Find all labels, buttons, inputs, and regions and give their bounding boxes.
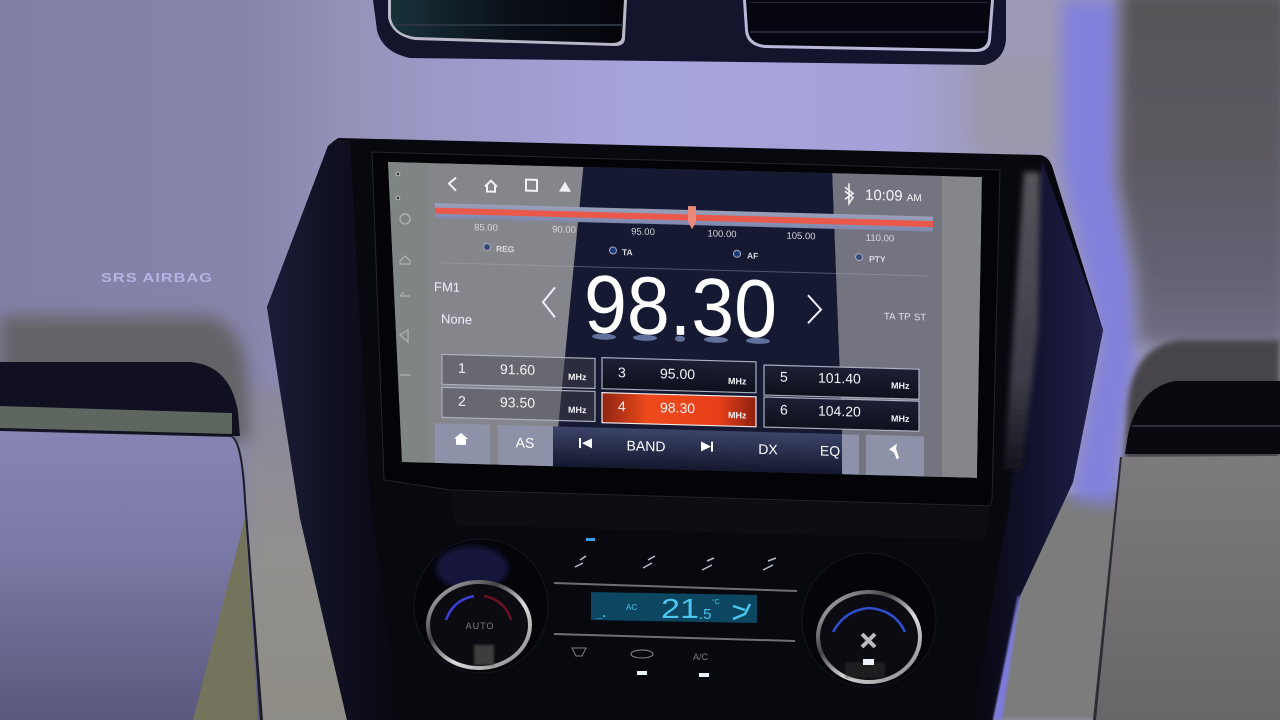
preset labels: MHz	[728, 376, 747, 387]
radio options	[484, 243, 886, 264]
preset labels: 3	[618, 364, 626, 380]
main frequency: 98.30	[584, 259, 777, 355]
left knob: AUTO: AUTO	[466, 621, 494, 631]
air vents housing	[373, 0, 1006, 65]
preset labels: MHz	[568, 405, 587, 415]
preset labels: 4	[618, 398, 626, 414]
radio options: REG	[496, 244, 515, 254]
main frequency	[588, 275, 774, 344]
tune arrows	[543, 287, 821, 325]
label: SRS AIRBAG: SRS AIRBAG	[101, 270, 213, 285]
shadowed right column	[1118, 0, 1280, 345]
preset labels: 101.40	[818, 369, 861, 387]
band labels: FM1	[434, 279, 460, 295]
preset labels: MHz	[728, 410, 747, 421]
temperature display: _.	[595, 606, 606, 620]
lower buttons	[572, 648, 709, 662]
icon: bluetooth	[845, 183, 853, 203]
radio options: TA	[622, 247, 633, 257]
console bezel	[267, 138, 1103, 720]
tuner band	[435, 203, 933, 232]
frequency scale: 110.00	[866, 233, 894, 245]
chrome reflection on right wing	[1004, 172, 1040, 470]
blue light column	[1062, 0, 1136, 505]
preset labels: 1	[458, 360, 466, 376]
right knob: fan	[802, 553, 936, 687]
fan mode icons	[575, 556, 776, 570]
preset labels: MHz	[891, 380, 910, 391]
preset buttons	[442, 353, 919, 431]
temperature display: °C	[712, 598, 720, 606]
frequency scale: 90.00	[552, 224, 576, 236]
lower buttons: A/C	[693, 652, 709, 662]
temperature display: 21	[661, 593, 699, 624]
frequency scale: 85.00	[474, 222, 498, 234]
preset labels: 5	[780, 368, 788, 385]
left lower panel with dark trim strip	[0, 316, 263, 720]
radio interface skewed to the screen perspective: None	[441, 311, 472, 327]
clock: 10:09 AM	[865, 187, 922, 205]
right lower panel with dark trim strip	[1093, 340, 1280, 720]
climate control panel	[414, 538, 936, 687]
side bezel icons	[396, 172, 410, 375]
status flags: TA TP ST	[884, 311, 926, 323]
preset labels: 6	[780, 401, 788, 418]
frequency scale: 105.00	[786, 231, 816, 242]
preset labels: 95.00	[660, 365, 695, 382]
bottom control icons	[454, 432, 899, 460]
bottom control bar: DX	[758, 441, 778, 457]
preset labels: 2	[458, 393, 466, 409]
bottom control bar	[435, 423, 924, 476]
indicator LEDs	[586, 538, 709, 677]
preset labels: 93.50	[500, 394, 535, 411]
temperature display: .5	[699, 606, 712, 623]
frequency scale	[474, 224, 894, 242]
preset labels: 104.20	[818, 402, 861, 420]
radio interface skewed to the screen perspective	[434, 172, 933, 477]
temperature display	[591, 592, 757, 624]
screen dark center glare band	[554, 160, 844, 480]
radio options: AF	[747, 251, 758, 261]
preset labels: 91.60	[500, 361, 535, 378]
frequency scale: 100.00	[707, 229, 737, 240]
preset labels: 98.30	[660, 399, 695, 416]
top status icons	[449, 178, 571, 194]
radio options: PTY	[869, 254, 886, 264]
preset labels: MHz	[891, 413, 910, 424]
preset labels: MHz	[568, 372, 587, 382]
radio screen	[388, 160, 982, 480]
bottom control bar: BAND	[627, 437, 665, 454]
bottom control bar: EQ	[820, 443, 840, 459]
frequency scale: 95.00	[631, 226, 655, 238]
left knob: AUTO	[414, 539, 548, 673]
bottom control bar: AS	[516, 434, 534, 451]
temperature display: AC	[626, 603, 637, 612]
preset labels	[458, 360, 910, 425]
blue sliver on the lower right wing	[993, 596, 1020, 720]
